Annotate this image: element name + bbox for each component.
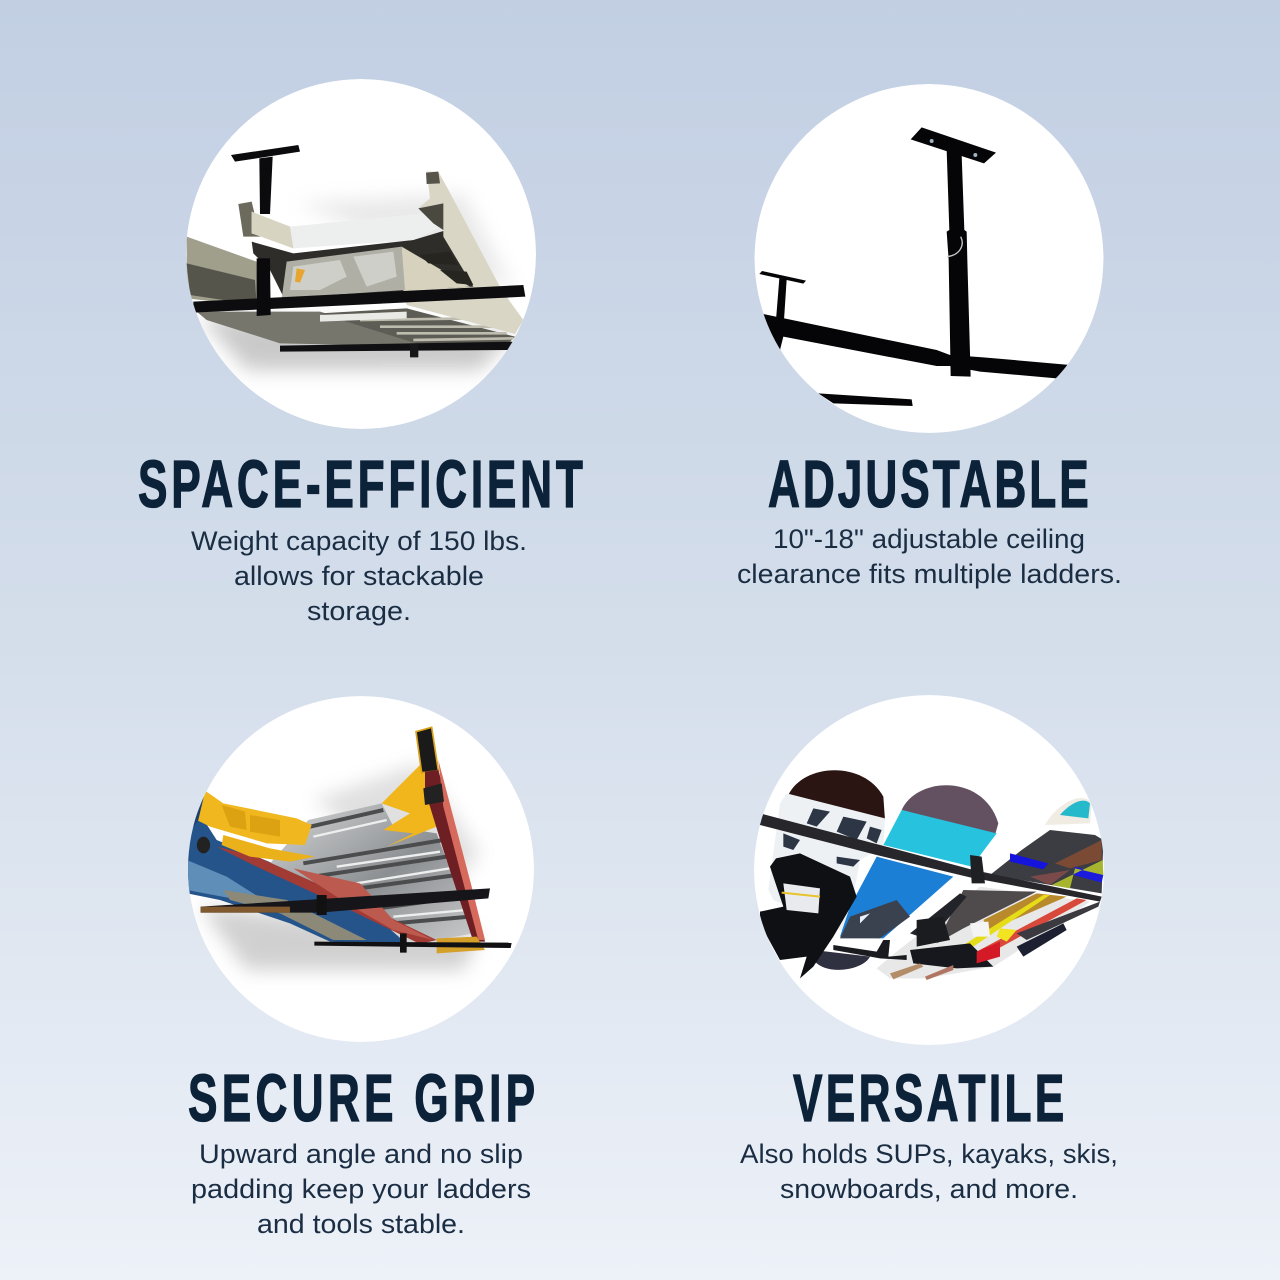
heading: space-efficient: SPACE-EFFICIENT xyxy=(138,448,583,522)
heading: versatile: VERSATILE xyxy=(793,1062,1064,1136)
icon: adjustable ceiling bracket silhouette xyxy=(754,84,1104,433)
text block: adjustable description: 10"-18" adjustable ceiling xyxy=(773,524,1085,554)
text block: space-efficient description: storage. xyxy=(307,596,411,626)
heading: secure grip: SECURE GRIP xyxy=(188,1062,535,1136)
text block: adjustable description: clearance fits multiple ladders. xyxy=(737,559,1122,589)
text block: secure grip description: Upward angle and no slip xyxy=(199,1139,523,1169)
text block: adjustable description xyxy=(737,524,1122,589)
text block: versatile description: Also holds SUPs, kayaks, skis, xyxy=(740,1139,1118,1169)
panel: secure grip xyxy=(187,696,535,1239)
text block: space-efficient description xyxy=(191,526,527,626)
text block: versatile description: snowboards, and more. xyxy=(780,1174,1078,1204)
text block: secure grip description: padding keep your ladders xyxy=(191,1174,531,1204)
panel: versatile xyxy=(740,695,1118,1204)
text block: secure grip description: and tools stable. xyxy=(257,1209,465,1239)
icon: ladder and bucket on ceiling rack xyxy=(186,79,536,429)
heading: adjustable: ADJUSTABLE xyxy=(768,448,1089,522)
text block: space-efficient description: Weight capacity of 150 lbs. xyxy=(191,526,527,556)
text block: space-efficient description: allows for stackable xyxy=(234,561,484,591)
panel: adjustable xyxy=(737,84,1122,589)
icon: stacked ladders on ceiling rack xyxy=(187,696,534,1042)
panel: space-efficient xyxy=(138,79,583,626)
icon: snowboards and skis on ceiling rack xyxy=(754,695,1104,1045)
text block: secure grip description xyxy=(191,1139,531,1239)
text block: versatile description xyxy=(740,1139,1118,1204)
